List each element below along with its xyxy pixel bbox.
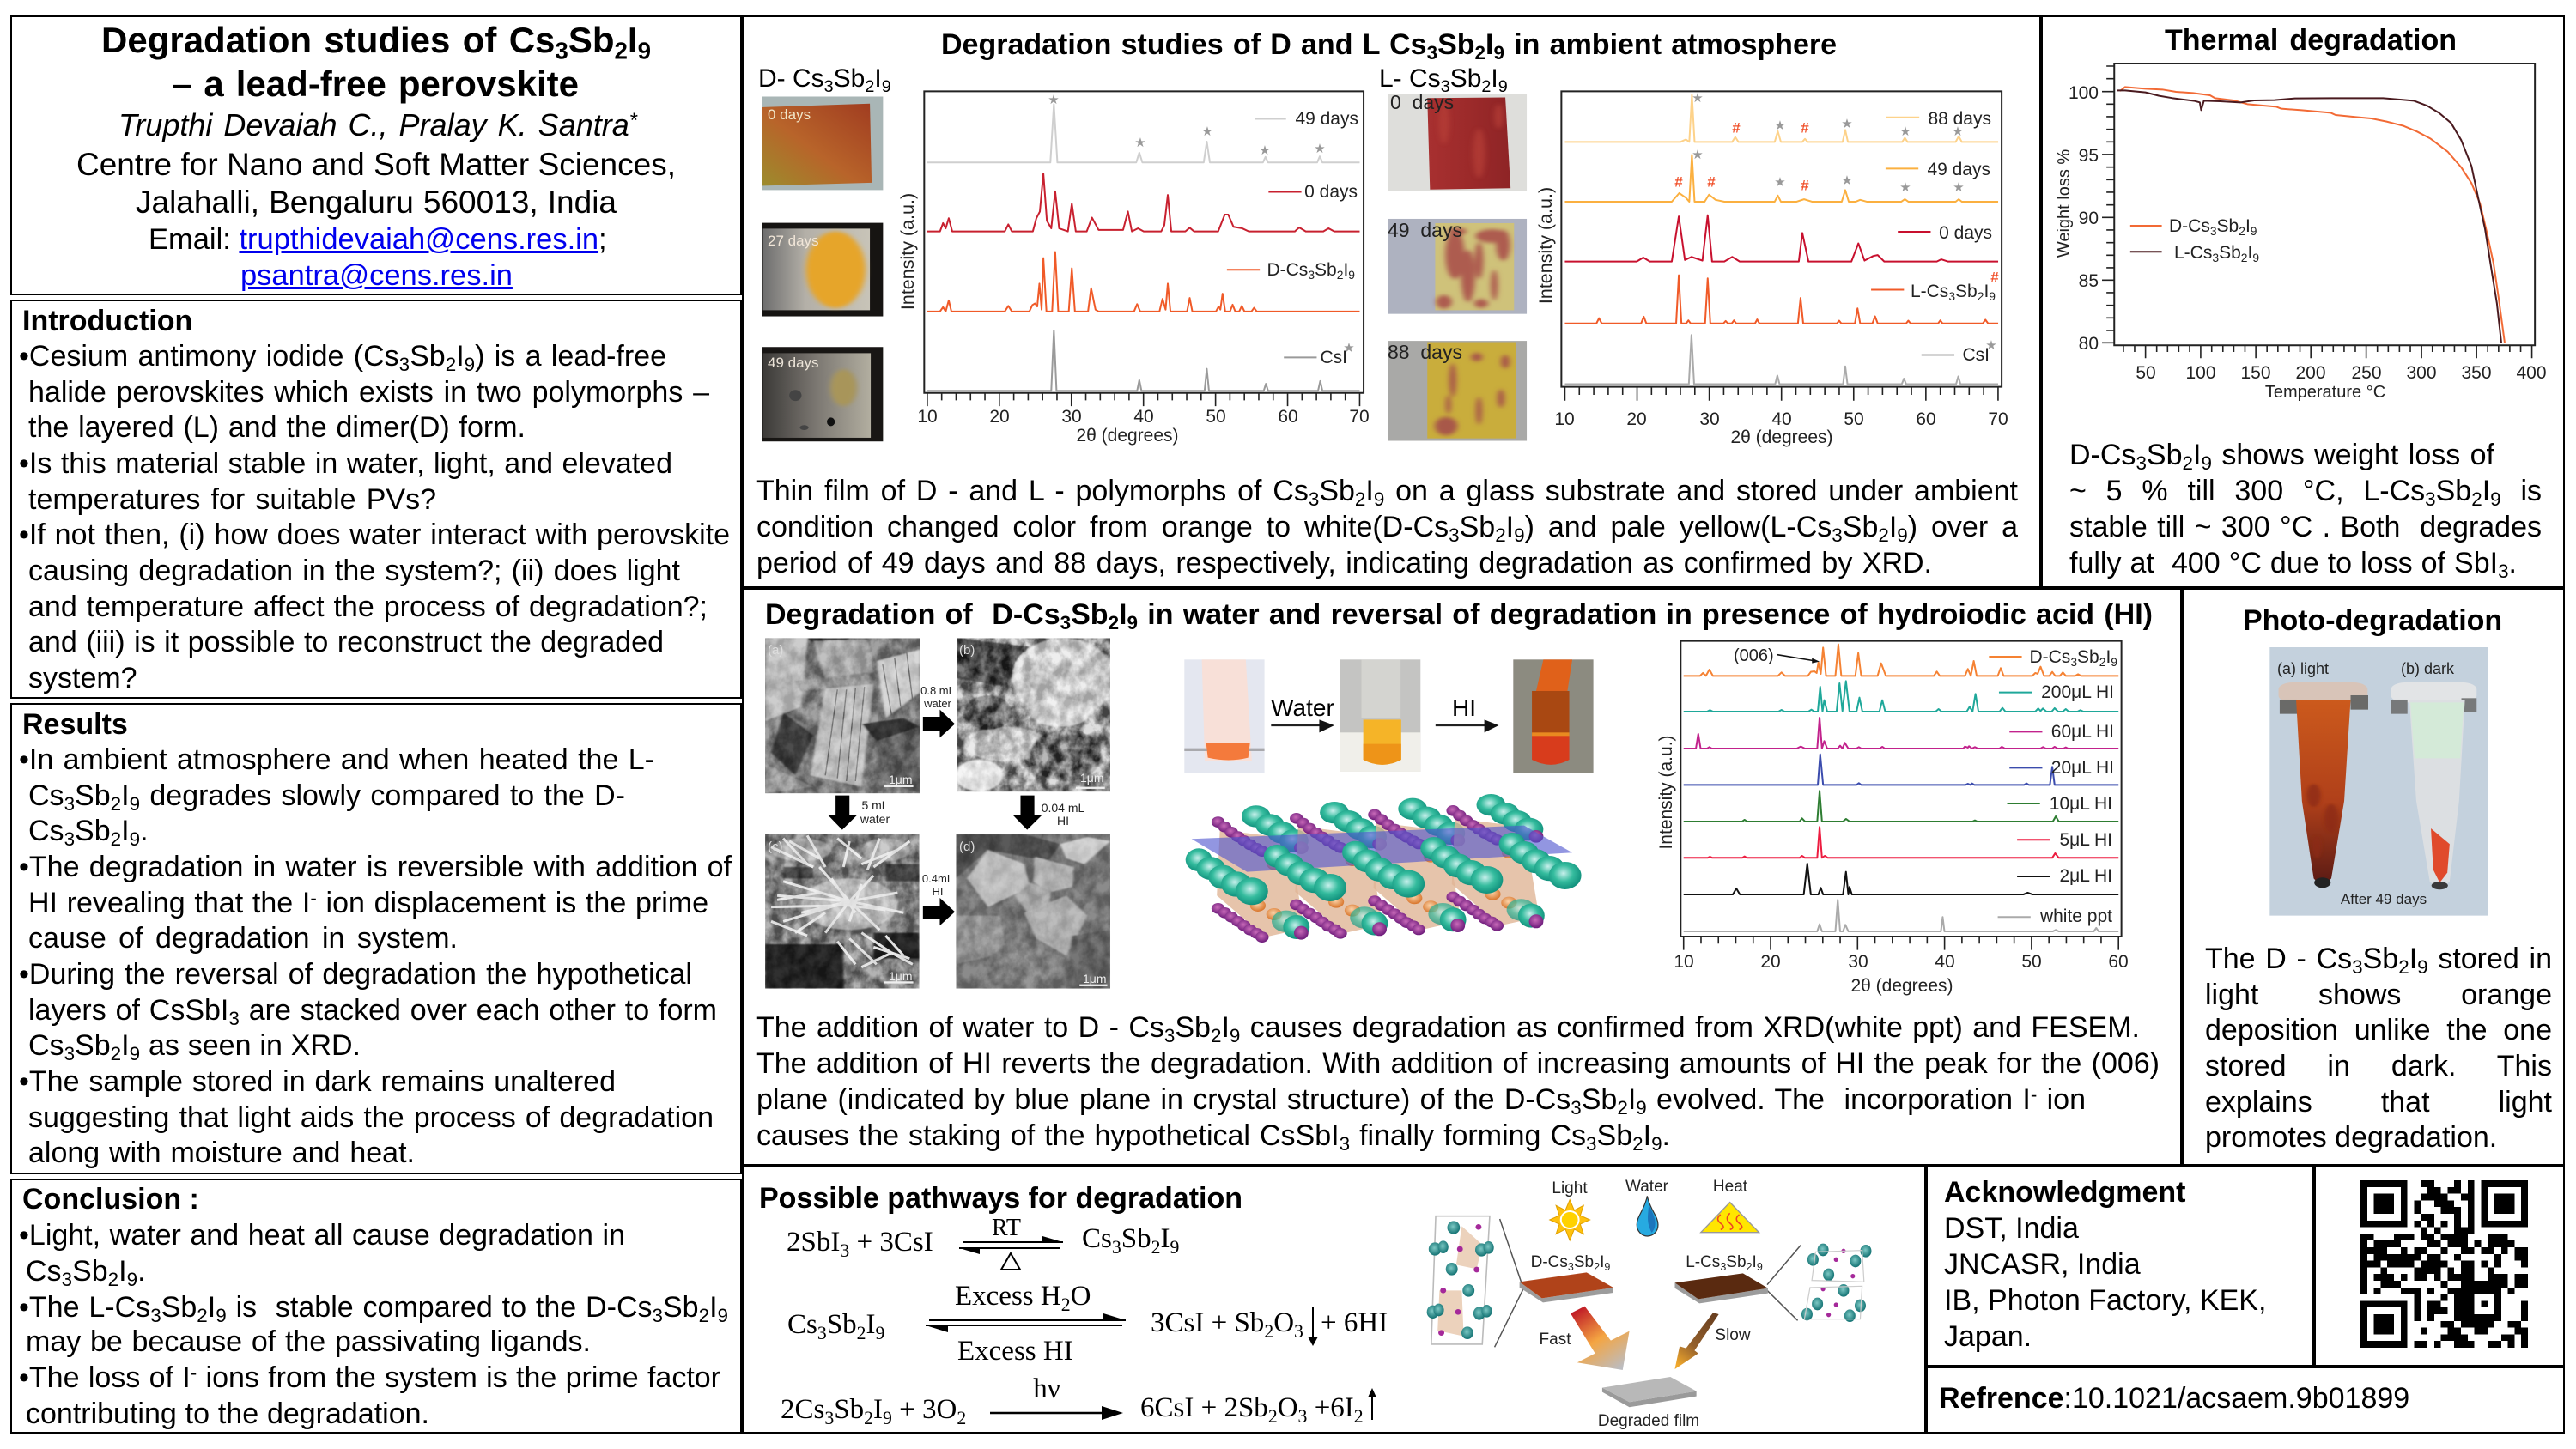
chart: XRD with increasing HI: [1656, 641, 2129, 996]
chart: XRD of L-Cs3Sb2I9: #: [1674, 173, 1683, 191]
micrographs: FESEM images with arrows: [765, 638, 1115, 989]
photo: D film 27 days: 27 days: [768, 233, 819, 249]
chart: XRD of D-Cs3Sb2I9: 0 days: [1304, 182, 1358, 202]
text: photo-degradation description: stored in dark. This: [2205, 1050, 2552, 1082]
text: thermal description: fully at 400 °C due to loss of SbI3.: [2069, 547, 2517, 582]
heading: thermal degradation: Thermal degradation: [2165, 24, 2457, 57]
chart: thermogravimetric curves: 100: [2185, 363, 2216, 383]
text: conclusion bullets: [19, 1219, 728, 1430]
heading: degradation in water: Degradation of D-Cs3Sb2I9 in water and reversal of degradation in presence of hydroiodic acid (HI): [765, 598, 2153, 634]
photos: vials with water and HI: HI: [1452, 694, 1476, 721]
equation: formation: [787, 1215, 1179, 1270]
text: introduction bullets: causing degradation in the system?; (ii) does light: [28, 555, 680, 587]
micrographs: FESEM images with arrows: water: [860, 812, 890, 826]
icon: QR code: [2360, 1180, 2528, 1348]
chart: XRD of L-Cs3Sb2I9: ★: [1841, 116, 1853, 131]
text: thermal description: D-Cs3Sb2I9 shows weight loss of: [2069, 439, 2494, 474]
text: conclusion bullets: •Light, water and heat all cause degradation in: [19, 1219, 625, 1252]
chart: XRD with increasing HI: 2μL HI: [2059, 866, 2112, 886]
panel: conclusion: [10, 1179, 742, 1434]
text: introduction bullets: temperatures for suitable PVs?: [28, 483, 436, 516]
text: water degradation description: The addition of water to D - Cs3Sb2I9 causes degradation as confirmed from XRD(white ppt) and FESEM.: [756, 1011, 2140, 1046]
text: ambient description: [756, 475, 2018, 579]
text: introduction bullets: the layered (L) and the dimer(D) form.: [28, 411, 526, 444]
equation: light driven: 2Cs3Sb2I9 + 3O2: [781, 1394, 966, 1428]
text: acknowledgment list: Japan.: [1944, 1320, 2032, 1353]
text: photo-degradation description: [2205, 943, 2552, 1154]
text: introduction bullets: and (iii) is it possible to reconstruct the degraded: [28, 626, 664, 658]
chart: XRD of D-Cs3Sb2I9: ★: [1201, 124, 1213, 139]
chart: XRD of L-Cs3Sb2I9: 88 days: [1928, 109, 1991, 129]
micrographs: FESEM images with arrows: (a): [768, 643, 783, 658]
illustration: degradation schematic: Water: [1625, 1178, 1669, 1196]
chart: XRD with increasing HI: white ppt: [2039, 906, 2112, 926]
text: email line 1: Email: trupthidevaiah@cens.res.in;: [149, 223, 607, 256]
chart: thermogravimetric curves: 300: [2406, 363, 2437, 383]
text: email line 2: psantra@cens.res.in: [240, 259, 513, 292]
equation: water and HI: + 6HI: [1321, 1307, 1388, 1338]
text: results bullets: suggesting that light aids the process of degradation: [28, 1101, 714, 1134]
panel: acknowledgment: [1926, 1166, 2314, 1367]
chart: XRD of L-Cs3Sb2I9: ★: [1774, 174, 1786, 190]
text: affiliation line 2: Jalahalli, Bengaluru 560013, India: [136, 185, 617, 220]
chart: XRD of L-Cs3Sb2I9: #: [1732, 120, 1741, 136]
chart: XRD of D-Cs3Sb2I9: 50: [1206, 407, 1226, 427]
illustration: degradation schematic: Heat: [1713, 1178, 1748, 1196]
photo: L film 49 days: 49 days: [1388, 219, 1462, 241]
chart: thermogravimetric curves: 95: [2079, 146, 2099, 166]
equation: water and HI: [787, 1281, 1388, 1367]
chart: XRD with increasing HI: 50: [2021, 952, 2042, 972]
photo: L film 0 days: 0 days: [1390, 91, 1454, 113]
equation: light driven: hν: [1033, 1373, 1060, 1404]
micrographs: FESEM images with arrows: HI: [933, 885, 943, 898]
equation: light driven: [781, 1373, 1376, 1428]
photo: L film 0 days: [1388, 91, 1527, 191]
text: water degradation description: [756, 1011, 2160, 1155]
chart: XRD with increasing HI: 10μL HI: [2050, 794, 2112, 814]
chart: thermogravimetric curves: Temperature °C: [2265, 383, 2385, 402]
chart: XRD of L-Cs3Sb2I9: ★: [1952, 124, 1964, 139]
chart: XRD of D-Cs3Sb2I9: Intensity (a.u.): [897, 193, 918, 310]
chart: XRD of D-Cs3Sb2I9: ★: [1314, 141, 1326, 156]
chart: thermogravimetric curves: [2055, 64, 2547, 402]
text: results bullets: Cs3Sb2I9 degrades slowly compared to the D-: [28, 779, 625, 815]
illustration: degradation schematic: [1427, 1178, 1871, 1430]
text: thermal description: ~ 5 % till 300 °C, L-Cs3Sb2I9 is: [2069, 475, 2542, 510]
text: ambient description: condition changed color from orange to white(D-Cs3Sb2I9) and pale yellow(L-Cs3Sb2I9) over a: [756, 511, 2018, 546]
illustration: crystal structure with blue (006) plane: [1186, 794, 1582, 943]
photos: vials with water and HI: Water: [1271, 694, 1334, 721]
photo: D film 49 days: 49 days: [768, 355, 819, 371]
text: conclusion bullets: may be because of the passivating ligands.: [26, 1325, 591, 1358]
chart: XRD with increasing HI: 20μL HI: [2051, 758, 2114, 778]
chart: XRD of L-Cs3Sb2I9: ★: [1692, 90, 1704, 106]
equation: formation: Cs3Sb2I9: [1082, 1223, 1179, 1258]
chart: XRD of L-Cs3Sb2I9: 10: [1554, 409, 1575, 429]
chart: XRD of D-Cs3Sb2I9: ★: [1134, 135, 1146, 150]
chart: XRD with increasing HI: 60μL HI: [2051, 722, 2114, 742]
chart: XRD with increasing HI: 30: [1848, 952, 1868, 972]
chart: XRD of D-Cs3Sb2I9: 49 days: [1295, 109, 1358, 129]
equation: water and HI: Excess HI: [957, 1336, 1073, 1367]
chart: thermogravimetric curves: 150: [2240, 363, 2271, 383]
chart: thermogravimetric curves: L-Cs3Sb2I9: [2174, 243, 2259, 264]
chart: XRD of D-Cs3Sb2I9: D-Cs3Sb2I9: [1267, 260, 1355, 282]
text: acknowledgment list: [1944, 1212, 2266, 1353]
chart: thermogravimetric curves: 80: [2079, 334, 2099, 354]
chart: XRD of L-Cs3Sb2I9: #: [1990, 270, 1999, 285]
panel: possible pathways: [742, 1166, 1926, 1434]
chart: XRD with increasing HI: Intensity (a.u.): [1656, 735, 1676, 850]
chart: XRD of L-Cs3Sb2I9: Intensity (a.u.): [1535, 187, 1556, 304]
photo: L film 88 days: 88 days: [1388, 341, 1462, 363]
chart: thermogravimetric curves: 200: [2295, 363, 2326, 383]
chart: thermogravimetric curves: D-Cs3Sb2I9: [2169, 216, 2257, 238]
panel: introduction: [10, 300, 742, 699]
photos: vials with water and HI: [1184, 659, 1594, 773]
text: results bullets: •During the reversal of degradation the hypothetical: [19, 958, 692, 991]
chart: XRD with increasing HI: 200μL HI: [2041, 682, 2114, 702]
heading: possible pathways: Possible pathways for degradation: [759, 1182, 1242, 1215]
chart: XRD with increasing HI: 5μL HI: [2059, 830, 2112, 850]
micrographs: FESEM images with arrows: HI: [1057, 814, 1069, 828]
chart: XRD of L-Cs3Sb2I9: 49 days: [1927, 160, 1990, 179]
chart: thermogravimetric curves: 50: [2136, 363, 2156, 383]
micrographs: FESEM images with arrows: (d): [959, 840, 975, 854]
micrographs: FESEM images with arrows: 0.04 mL: [1042, 801, 1085, 815]
chart: XRD of D-Cs3Sb2I9: 30: [1061, 407, 1082, 427]
micrographs: FESEM images with arrows: 1μm: [1083, 972, 1107, 985]
illustration: degradation schematic: D-Cs3Sb2I9: [1531, 1253, 1610, 1273]
heading: acknowledgment: Acknowledgment: [1944, 1176, 2185, 1209]
heading: conclusion: Conclusion :: [22, 1183, 199, 1216]
heading: poster title line 2: – a lead-free perovskite: [172, 64, 579, 104]
heading: ambient degradation: Degradation studies of D and L Cs3Sb2I9 in ambient atmosphere: [941, 28, 1837, 64]
chart: XRD of L-Cs3Sb2I9: ★: [1899, 124, 1911, 139]
text: introduction bullets: system?: [28, 662, 137, 694]
equation: light driven: 6CsI + 2Sb2O3 +6I2: [1140, 1392, 1364, 1427]
chart: thermogravimetric curves: 90: [2079, 209, 2099, 228]
text: acknowledgment list: IB, Photon Factory, KEK,: [1944, 1284, 2266, 1317]
equation: formation: 2SbI3 + 3CsI: [787, 1227, 933, 1261]
chart: XRD of D-Cs3Sb2I9: 2θ (degrees): [1076, 426, 1179, 446]
text: results bullets: •The degradation in water is reversible with addition of: [19, 851, 732, 883]
chart: XRD of D-Cs3Sb2I9: CsI: [1321, 348, 1347, 367]
text: results bullets: along with moisture and heat.: [28, 1137, 415, 1169]
text: introduction bullets: •Is this material stable in water, light, and elevated: [19, 447, 672, 480]
chart: thermogravimetric curves: 350: [2461, 363, 2492, 383]
photo: D film 0 days: 0 days: [768, 106, 811, 123]
chart: XRD of D-Cs3Sb2I9: 60: [1278, 407, 1298, 427]
chart: XRD of L-Cs3Sb2I9: 20: [1626, 409, 1647, 429]
chart: XRD of D-Cs3Sb2I9: ★: [1259, 142, 1271, 158]
text: affiliation line 1: Centre for Nano and Soft Matter Sciences,: [76, 147, 676, 182]
chart: XRD of L-Cs3Sb2I9: ★: [1899, 179, 1911, 195]
micrographs: FESEM images with arrows: 0.8 mL: [920, 684, 955, 697]
text: introduction bullets: [19, 340, 730, 694]
text: introduction bullets: and temperature affect the process of degradation?;: [28, 591, 708, 623]
photo: tubes in light and dark: (b) dark: [2401, 660, 2455, 677]
illustration: degradation schematic: Slow: [1715, 1326, 1751, 1344]
label: D- Cs3Sb2I9: D- Cs3Sb2I9: [758, 64, 891, 96]
text: photo-degradation description: promotes degradation.: [2205, 1121, 2497, 1154]
chart: XRD of D-Cs3Sb2I9: ★: [1048, 92, 1060, 107]
chart: XRD of D-Cs3Sb2I9: 70: [1349, 407, 1370, 427]
micrographs: FESEM images with arrows: (c): [768, 840, 783, 854]
text: conclusion bullets: •The L-Cs3Sb2I9 is stable compared to the D-Cs3Sb2I9: [19, 1291, 728, 1326]
chart: XRD with increasing HI: 60: [2108, 952, 2129, 972]
text: acknowledgment list: JNCASR, India: [1944, 1248, 2141, 1281]
chart: XRD of D-Cs3Sb2I9: 10: [917, 407, 938, 427]
chart: XRD of L-Cs3Sb2I9: 2θ (degrees): [1730, 427, 1833, 447]
text: conclusion bullets: Cs3Sb2I9.: [26, 1255, 146, 1290]
panel: title and authors: [10, 15, 742, 295]
photo: tubes in light and dark: [2269, 647, 2488, 916]
text: introduction bullets: halide perovskites which exists in two polymorphs –: [28, 376, 709, 409]
equation: water and HI: 3CsI + Sb2O3: [1151, 1307, 1303, 1342]
chart: XRD with increasing HI: (006): [1734, 646, 1774, 665]
text: ambient description: period of 49 days and 88 days, respectively, indicating degradation as confirmed by XRD.: [756, 547, 1932, 579]
photo: D film 49 days: [762, 347, 883, 441]
text: water degradation description: causes the staking of the hypothetical CsSbI3 finally forming Cs3Sb2I9.: [756, 1119, 1670, 1155]
chart: XRD of D-Cs3Sb2I9: [897, 91, 1370, 446]
chart: XRD of L-Cs3Sb2I9: 50: [1844, 409, 1864, 429]
panel: QR code: [2314, 1166, 2565, 1367]
chart: XRD of L-Cs3Sb2I9: ★: [1692, 147, 1704, 162]
heading: photo-degradation: Photo-degradation: [2243, 604, 2502, 637]
equation: water and HI: Excess H2O: [955, 1281, 1091, 1315]
illustration: degradation schematic: Fast: [1540, 1331, 1571, 1349]
chart: XRD with increasing HI: 20: [1760, 952, 1781, 972]
text: results bullets: [19, 743, 732, 1169]
illustration: degradation schematic: Light: [1552, 1179, 1588, 1197]
chart: XRD of L-Cs3Sb2I9: #: [1801, 177, 1809, 194]
text: conclusion bullets: •The loss of I- ions from the system is the prime factor: [19, 1361, 720, 1394]
text: photo-degradation description: deposition unlike the one: [2205, 1014, 2552, 1046]
photo: tubes in light and dark: (a) light: [2277, 660, 2329, 677]
photo: D film 0 days: [762, 96, 883, 190]
text: thermal description: stable till ~ 300 °C . Both degrades: [2069, 511, 2542, 543]
photo: D film 27 days: [762, 223, 883, 317]
equation: water and HI: Cs3Sb2I9: [787, 1309, 884, 1343]
chart: thermogravimetric curves: 100: [2069, 83, 2099, 103]
text: results bullets: Cs3Sb2I9 as seen in XRD.: [28, 1029, 361, 1064]
photo: L film 88 days: [1388, 341, 1527, 441]
heading: results: Results: [22, 708, 128, 741]
chart: XRD with increasing HI: 40: [1935, 952, 1955, 972]
panel: results: [10, 703, 742, 1174]
photo: L film 49 days: [1388, 219, 1527, 314]
micrographs: FESEM images with arrows: 1μm: [889, 969, 913, 983]
equation: formation: RT: [992, 1215, 1021, 1241]
text: results bullets: HI revealing that the I- ion displacement is the prime: [28, 887, 708, 919]
chart: XRD of D-Cs3Sb2I9: 40: [1133, 407, 1154, 427]
panel: reference: [1926, 1367, 2565, 1434]
text: results bullets: •The sample stored in dark remains unaltered: [19, 1065, 616, 1098]
text: thermal description: [2069, 439, 2542, 582]
chart: thermogravimetric curves: 250: [2351, 363, 2382, 383]
text: conclusion bullets: contributing to the degradation.: [26, 1397, 429, 1430]
chart: XRD with increasing HI: D-Cs3Sb2I9: [2029, 647, 2117, 669]
chart: XRD of L-Cs3Sb2I9: CsI: [1963, 345, 1990, 365]
panel: degradation in water and reversal with HI: [742, 588, 2182, 1166]
micrographs: FESEM images with arrows: (b): [959, 643, 975, 658]
chart: XRD with increasing HI: 2θ (degrees): [1850, 976, 1953, 996]
chart: XRD of L-Cs3Sb2I9: ★: [1841, 173, 1853, 188]
photo: tubes in light and dark: After 49 days: [2341, 891, 2427, 907]
micrographs: FESEM images with arrows: 0.4mL: [922, 872, 953, 885]
chart: XRD of L-Cs3Sb2I9: ★: [1953, 179, 1965, 195]
chart: XRD of L-Cs3Sb2I9: ★: [1774, 118, 1786, 133]
heading: poster title line 1: Degradation studies of Cs3Sb2I9: [101, 20, 651, 64]
chart: XRD of L-Cs3Sb2I9: 40: [1771, 409, 1792, 429]
chart: XRD of L-Cs3Sb2I9: 0 days: [1939, 223, 1992, 243]
micrographs: FESEM images with arrows: 5 mL: [861, 798, 889, 812]
text: results bullets: cause of degradation in system.: [28, 922, 458, 955]
text: results bullets: layers of CsSbI3 are stacked over each other to form: [28, 994, 717, 1029]
micrographs: FESEM images with arrows: 1μm: [889, 773, 913, 786]
chart: XRD of D-Cs3Sb2I9: 20: [989, 407, 1010, 427]
panel: photo-degradation: [2182, 588, 2565, 1166]
chart: XRD of L-Cs3Sb2I9: L-Cs3Sb2I9: [1911, 282, 1996, 303]
text: results bullets: Cs3Sb2I9.: [28, 815, 149, 850]
heading: introduction: Introduction: [22, 305, 192, 337]
chart: thermogravimetric curves: 400: [2516, 363, 2547, 383]
illustration: degradation schematic: L-Cs3Sb2I9: [1686, 1253, 1763, 1273]
text: photo-degradation description: light shows orange: [2205, 979, 2552, 1011]
chart: XRD of L-Cs3Sb2I9: 60: [1916, 409, 1936, 429]
text: results bullets: •In ambient atmosphere and when heated the L-: [19, 743, 654, 776]
text: photo-degradation description: The D - Cs3Sb2I9 stored in: [2205, 943, 2552, 978]
text: water degradation description: plane (indicated by blue plane in crystal structure) of the D-Cs3Sb2I9 evolved. The incorporation I- ion: [756, 1083, 2086, 1119]
panel: thermal degradation: [2041, 15, 2565, 588]
text: introduction bullets: •If not then, (i) how does water interact with perovskite: [19, 518, 730, 551]
chart: XRD of L-Cs3Sb2I9: ★: [1985, 337, 1997, 353]
chart: XRD of L-Cs3Sb2I9: #: [1801, 120, 1809, 136]
chart: XRD of L-Cs3Sb2I9: 70: [1988, 409, 2008, 429]
chart: thermogravimetric curves: 85: [2079, 271, 2099, 291]
chart: XRD of D-Cs3Sb2I9: ★: [1343, 340, 1355, 355]
chart: XRD of L-Cs3Sb2I9: 30: [1699, 409, 1720, 429]
label: L- Cs3Sb2I9: L- Cs3Sb2I9: [1379, 64, 1508, 96]
text: reference: Refrence:10.1021/acsaem.9b01899: [1939, 1382, 2409, 1415]
micrographs: FESEM images with arrows: water: [923, 697, 952, 710]
text: water degradation description: The addition of HI reverts the degradation. With addition of increasing amounts of HI the peak for the (006): [756, 1047, 2160, 1080]
text: photo-degradation description: explains that light: [2205, 1086, 2552, 1119]
text: authors: Trupthi Devaiah C., Pralay K. Santra*: [118, 107, 637, 142]
text: introduction bullets: •Cesium antimony iodide (Cs3Sb2I9) is a lead-free: [19, 340, 666, 375]
text: acknowledgment list: DST, India: [1944, 1212, 2079, 1245]
chart: XRD of L-Cs3Sb2I9: #: [1707, 173, 1716, 191]
illustration: degradation schematic: Degraded film: [1598, 1412, 1699, 1430]
chart: XRD of L-Cs3Sb2I9: [1535, 90, 2008, 447]
chart: thermogravimetric curves: Weight loss %: [2055, 149, 2074, 258]
text: ambient description: Thin film of D - and L - polymorphs of Cs3Sb2I9 on a glass substrate and stored under ambient: [756, 475, 2018, 510]
micrographs: FESEM images with arrows: 1μm: [1080, 771, 1104, 785]
chart: XRD with increasing HI: 10: [1674, 952, 1694, 972]
panel: degradation in ambient atmosphere: [742, 15, 2041, 588]
